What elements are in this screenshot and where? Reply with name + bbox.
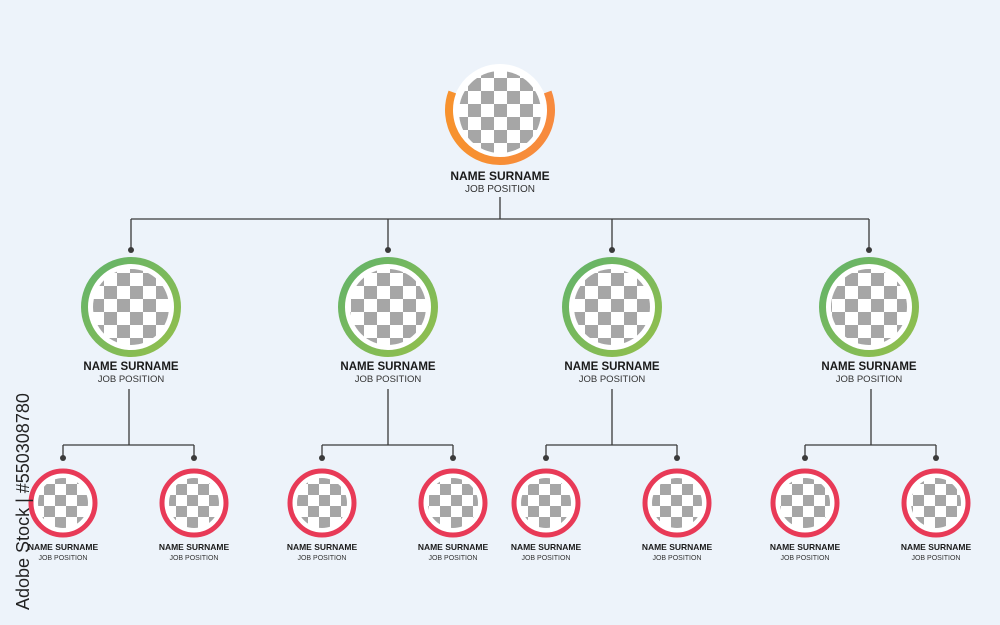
level 3 node 5: NAME SURNAME [511,542,582,552]
level 3 node 6: NAME SURNAME [642,542,713,552]
level 3 node 1: JOB POSITION [38,555,88,562]
level 2 node 3: NAME SURNAME [564,361,660,373]
level 3 node 5: JOB POSITION [521,555,571,562]
level 2 node 4 [821,260,917,385]
level 3 node 5 [511,471,582,562]
level 3 node 2 [159,471,230,562]
level 3 node 4: JOB POSITION [428,555,478,562]
level 2 node 2: JOB POSITION [355,374,421,385]
watermark id text: Adobe Stock | #550308780 [13,393,33,610]
level 3 node 8 [901,471,972,562]
level 3 node 4 [418,471,489,562]
level 3 node 1: NAME SURNAME [28,542,99,552]
level 3 node 1 [28,471,99,562]
level 3 node 3: NAME SURNAME [287,542,358,552]
level 3 node 3 [287,471,358,562]
top node [449,64,551,195]
connector lines [63,197,936,458]
level 3 node 4: NAME SURNAME [418,542,489,552]
level 2 node 3: JOB POSITION [579,374,645,385]
level 3 node 6: JOB POSITION [652,555,702,562]
level 2 node 3 [564,260,660,385]
top node: NAME SURNAME [450,169,550,183]
top node: JOB POSITION [465,184,535,195]
level 3 node 2: JOB POSITION [169,555,219,562]
connector dots [60,247,939,461]
level 3 node 7: JOB POSITION [780,555,830,562]
level 3 node 6 [642,471,713,562]
level 3 node 3: JOB POSITION [297,555,347,562]
level 2 node 2: NAME SURNAME [340,361,436,373]
level 2 node 1: JOB POSITION [98,374,164,385]
level 3 node 7 [770,471,841,562]
level 3 node 8: JOB POSITION [911,555,961,562]
level 2 node 2 [340,260,436,385]
level 3 node 7: NAME SURNAME [770,542,841,552]
level 2 node 1: NAME SURNAME [83,361,179,373]
level 2 node 4: NAME SURNAME [821,361,917,373]
level 3 node 8: NAME SURNAME [901,542,972,552]
level 2 node 4: JOB POSITION [836,374,902,385]
level 3 node 2: NAME SURNAME [159,542,230,552]
level 2 node 1 [83,260,179,385]
